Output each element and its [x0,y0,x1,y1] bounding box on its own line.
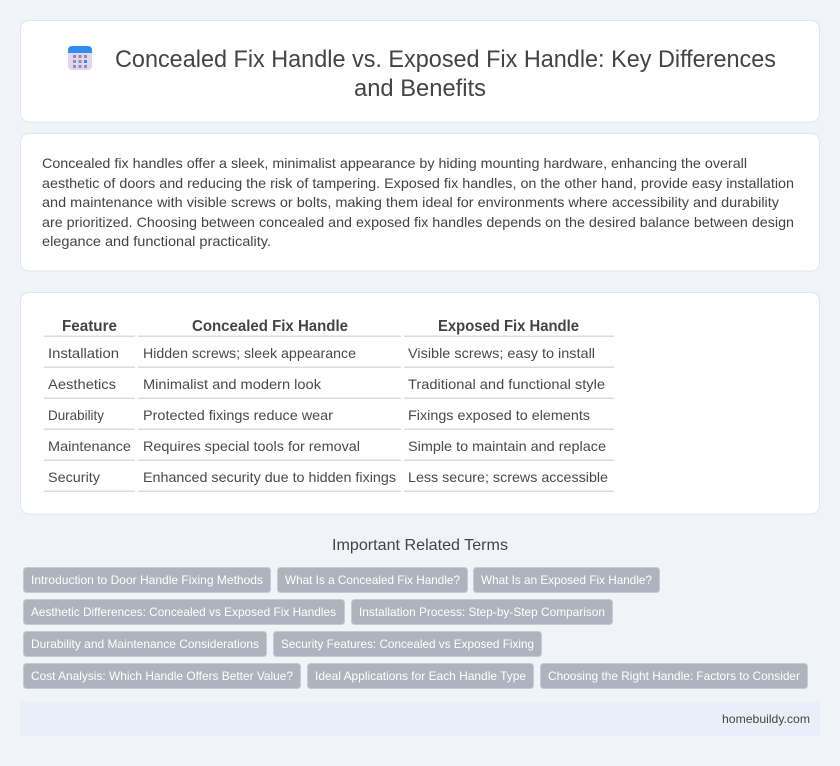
heading: important related terms: Important Related Terms [332,537,508,554]
header panel [20,20,820,122]
tag: Security Features: Concealed vs Exposed Fixing [281,637,534,651]
row: maintenance: Simple to maintain and replace [408,438,606,454]
row: installation: Hidden screws; sleek appearance [143,345,356,361]
intro text: are prioritized. Choosing between concealed and exposed fix handles depends on the desired balance between design [42,214,794,230]
title: Concealed Fix Handle vs. Exposed Fix Handle: Key Differences [115,46,776,73]
intro text: aesthetic of doors and reducing the risk of tampering. Exposed fix handles, on the other hand, provide easy installation [42,175,794,191]
tag [24,600,344,624]
row: security: Enhanced security due to hidden fixings [143,469,396,485]
panel: introduction [20,134,820,271]
title: and Benefits [354,75,486,102]
tag: Ideal Applications for Each Handle Type [315,669,526,683]
footer: homebuildy.com [722,712,810,726]
row: aesthetics [44,376,614,399]
row: durability: Durability [48,407,104,423]
table header: Concealed Fix Handle [192,318,348,335]
tag: Durability and Maintenance Considerations [31,637,259,651]
panel: comparison table [20,292,820,514]
row: security: Security [48,469,100,485]
table header: Feature [62,318,117,335]
tag [352,600,612,624]
row: aesthetics: Minimalist and modern look [143,376,322,392]
row: maintenance [44,438,614,461]
related term tags [24,568,808,688]
tag [308,664,534,688]
icon: calendar [68,46,92,70]
tag: What Is an Exposed Fix Handle? [481,573,652,587]
row: security: Less secure; screws accessible [408,469,608,485]
intro text [42,155,794,249]
row: security [44,469,614,492]
tag [24,568,270,592]
tag [274,632,542,656]
row: maintenance: Requires special tools for removal [143,438,360,454]
row: maintenance: Maintenance [48,438,131,454]
intro text: and maintenance with visible screws or bolts, making them ideal for environments where accessibility and durability [42,194,779,210]
tag [24,632,266,656]
row: durability: Fixings exposed to elements [408,407,590,423]
tag: Cost Analysis: Which Handle Offers Better Value? [31,669,293,683]
tag [278,568,468,592]
tag: What Is a Concealed Fix Handle? [285,573,460,587]
row: installation: Visible screws; easy to install [408,345,595,361]
footer [20,702,820,736]
intro text: elegance and functional practicality. [42,233,271,249]
table header [44,318,614,337]
tag [474,568,660,592]
tag: Installation Process: Step-by-Step Comparison [359,605,605,619]
tag: Choosing the Right Handle: Factors to Consider [548,669,800,683]
tag: Aesthetic Differences: Concealed vs Exposed Fix Handles [31,605,336,619]
intro text: Concealed fix handles offer a sleek, minimalist appearance by hiding mounting hardware, enhancing the overall [42,155,747,171]
title [115,46,776,102]
tag [540,664,808,688]
table header: Exposed Fix Handle [438,318,579,335]
row: durability [44,407,614,430]
row: installation [44,345,614,368]
row: durability: Protected fixings reduce wear [143,407,333,423]
row: aesthetics: Traditional and functional style [408,376,605,392]
row: aesthetics: Aesthetics [48,376,116,392]
tag: Introduction to Door Handle Fixing Methods [31,573,263,587]
row: installation: Installation [48,345,119,361]
tag [24,664,300,688]
